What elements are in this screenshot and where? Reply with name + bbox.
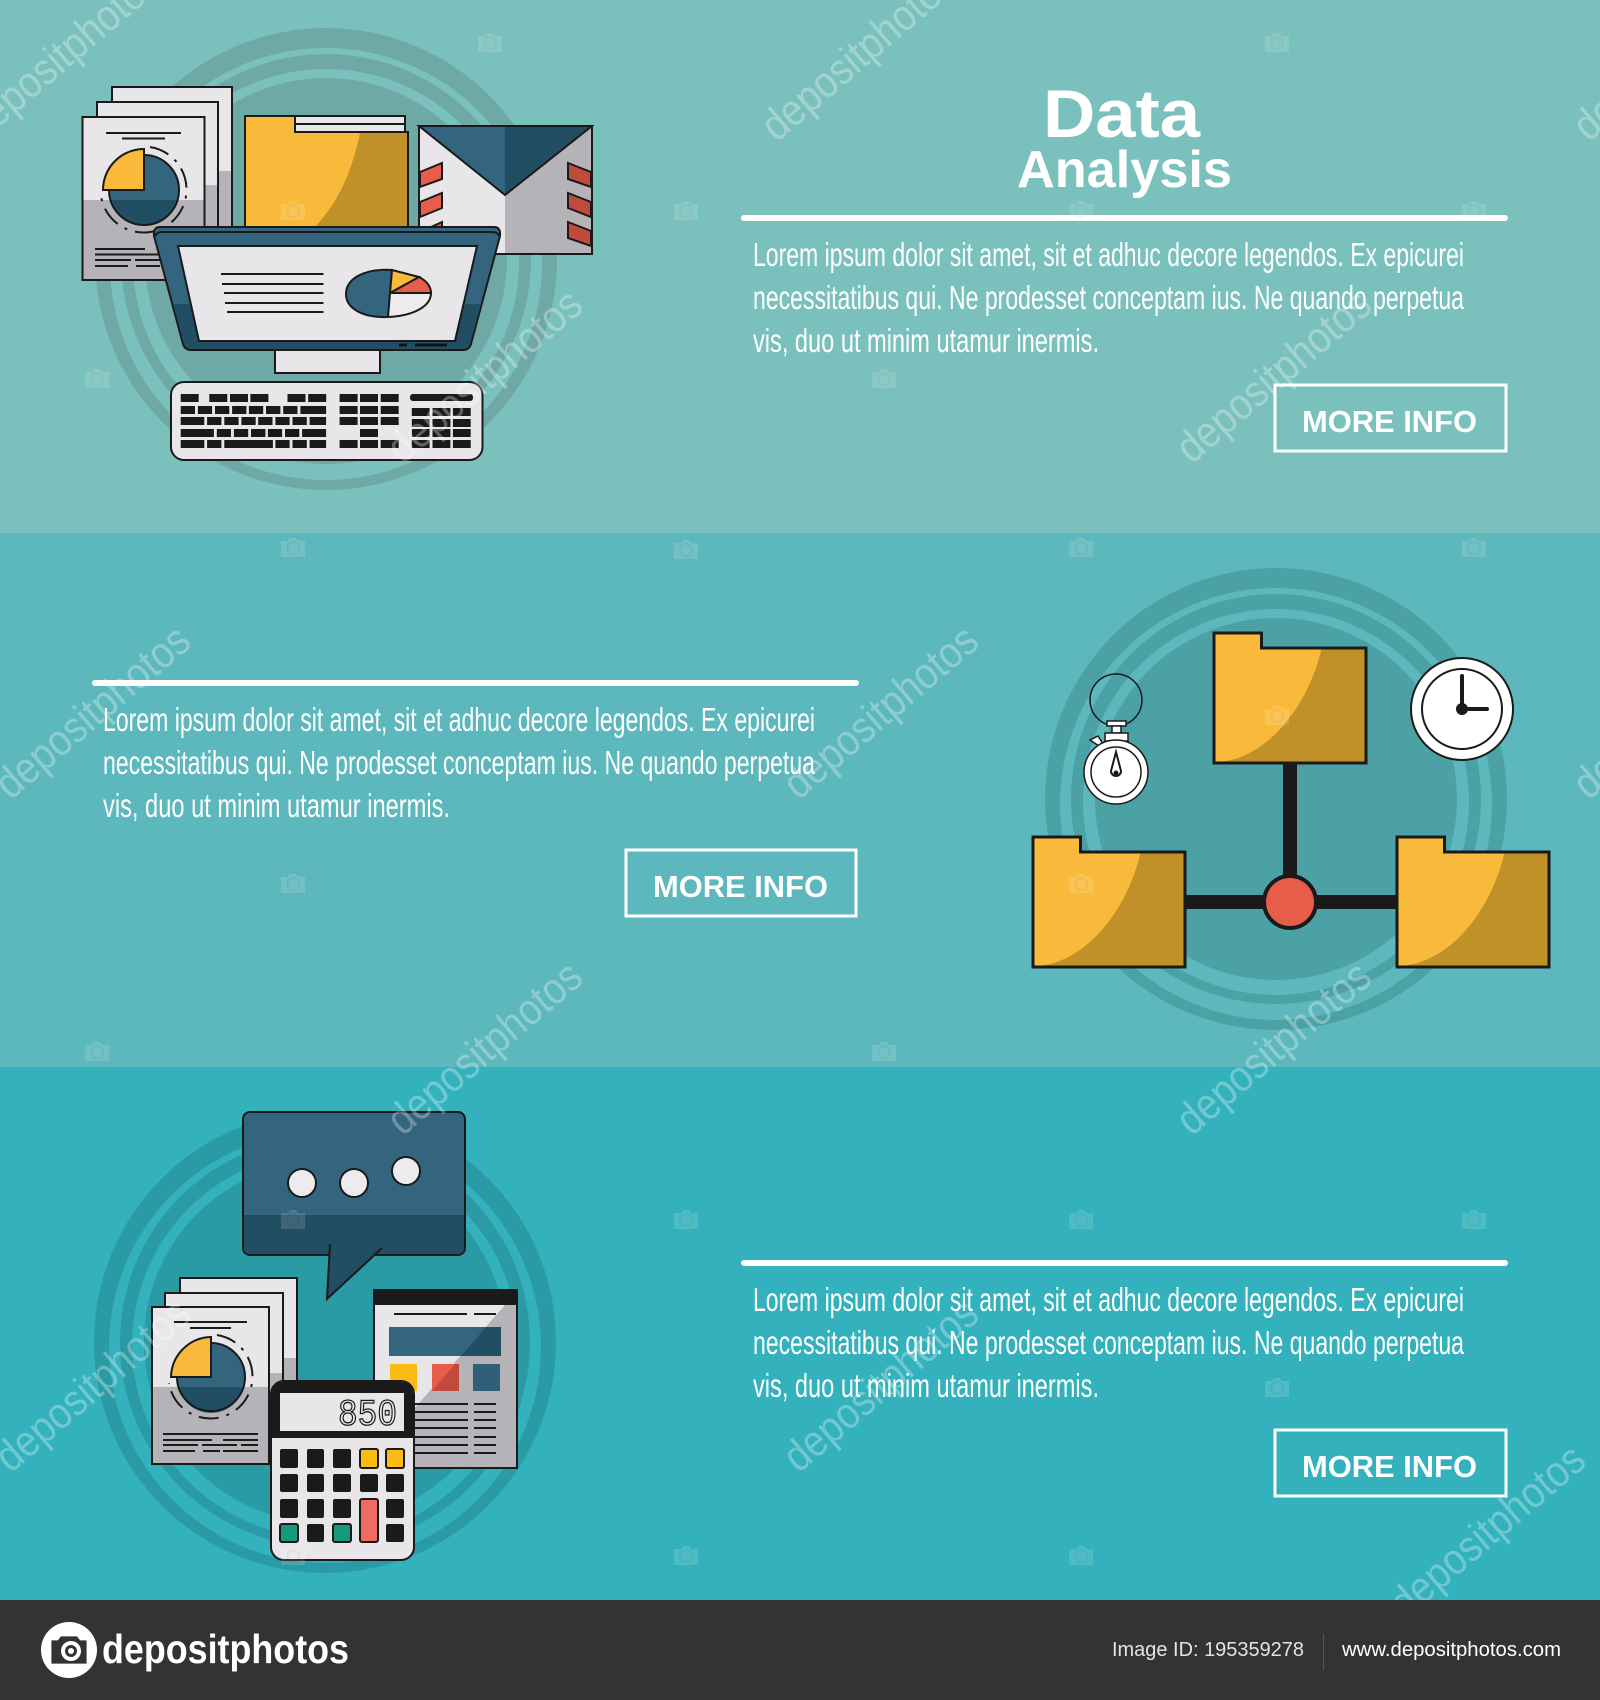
divider: bottom panel bbox=[741, 1260, 1508, 1266]
watermarks: depositphotos bbox=[773, 1288, 988, 1482]
illustration: folder network bbox=[1033, 568, 1549, 1030]
button: bottom panel more info: MORE INFO bbox=[1302, 1449, 1477, 1484]
icon: stopwatch bbox=[1084, 674, 1148, 804]
panel: top band bbox=[0, 0, 1600, 533]
icon: left folder bbox=[1033, 837, 1185, 967]
text block: middle panel: Lorem ipsum dolor sit amet, sit et adhuc decore legendos. Ex epicurei bbox=[103, 701, 815, 738]
text block: top panel: vis, duo ut minim utamur inermis. bbox=[753, 322, 1099, 359]
panel: bottom band bbox=[0, 1067, 1600, 1600]
watermark camera marks bbox=[85, 33, 1486, 1565]
button: middle panel more info: MORE INFO bbox=[653, 869, 828, 904]
icon: keyboard bbox=[171, 382, 482, 460]
button: top panel more info: MORE INFO bbox=[1302, 404, 1477, 439]
footer divider bbox=[1323, 1634, 1324, 1670]
watermarks: depositphotos bbox=[377, 279, 592, 473]
text block: top panel bbox=[753, 236, 1464, 359]
illustration: computer and documents bbox=[82, 28, 592, 490]
icon: yellow folder bbox=[245, 116, 408, 228]
watermarks: depositphotos bbox=[1166, 279, 1381, 473]
footer url: www.depositphotos.com bbox=[1341, 1639, 1561, 1661]
icon: right folder bbox=[1397, 837, 1549, 967]
title bbox=[1017, 76, 1232, 199]
watermarks: depositphotos bbox=[773, 615, 988, 809]
divider: top panel bbox=[741, 215, 1508, 221]
text block: middle panel: necessitatibus qui. Ne prodesset conceptam ius. Ne quando perpetua bbox=[103, 744, 815, 781]
icon: concentric circle backdrop bbox=[95, 28, 557, 490]
icon: envelope bbox=[419, 126, 592, 254]
icon: network hub bbox=[1264, 876, 1316, 928]
text block: bottom panel: vis, duo ut minim utamur inermis. bbox=[753, 1367, 1099, 1404]
title: Analysis bbox=[1017, 141, 1232, 199]
icon: monitor bbox=[154, 227, 500, 373]
icon: clock bbox=[1411, 658, 1513, 760]
icon: concentric circle backdrop bbox=[94, 1111, 556, 1573]
button: bottom panel more info bbox=[1275, 1430, 1506, 1496]
icon: concentric circle backdrop bbox=[1045, 568, 1507, 1030]
icon: network connectors bbox=[1185, 763, 1396, 902]
panel: middle band bbox=[0, 533, 1600, 1067]
button: middle panel more info bbox=[626, 850, 856, 916]
title: Data bbox=[1043, 76, 1201, 152]
icon: stacked report pages bbox=[152, 1278, 297, 1464]
icon: top folder bbox=[1214, 633, 1366, 763]
icon: speech bubble bbox=[243, 1112, 465, 1299]
text block: middle panel bbox=[103, 701, 815, 824]
illustration: reports, chat and calculator bbox=[94, 1111, 556, 1573]
footer bar bbox=[0, 1600, 1600, 1700]
text block: middle panel: vis, duo ut minim utamur inermis. bbox=[103, 787, 450, 824]
watermarks: depositphotos bbox=[1166, 951, 1381, 1145]
divider: middle panel bbox=[92, 680, 859, 686]
button: top panel more info bbox=[1275, 385, 1506, 451]
icon: calculator bbox=[271, 1381, 414, 1560]
calculator display digits: 850 bbox=[338, 1395, 397, 1437]
watermarks: depositphotos bbox=[377, 951, 592, 1145]
text block: bottom panel bbox=[753, 1281, 1464, 1404]
icon: stacked report pages bbox=[82, 87, 232, 280]
icon: web page layout bbox=[374, 1290, 517, 1468]
icon: footer camera logo bbox=[41, 1622, 97, 1678]
footer brand name: depositphotos bbox=[102, 1626, 349, 1672]
footer image id: Image ID: 195359278 bbox=[1112, 1639, 1304, 1661]
